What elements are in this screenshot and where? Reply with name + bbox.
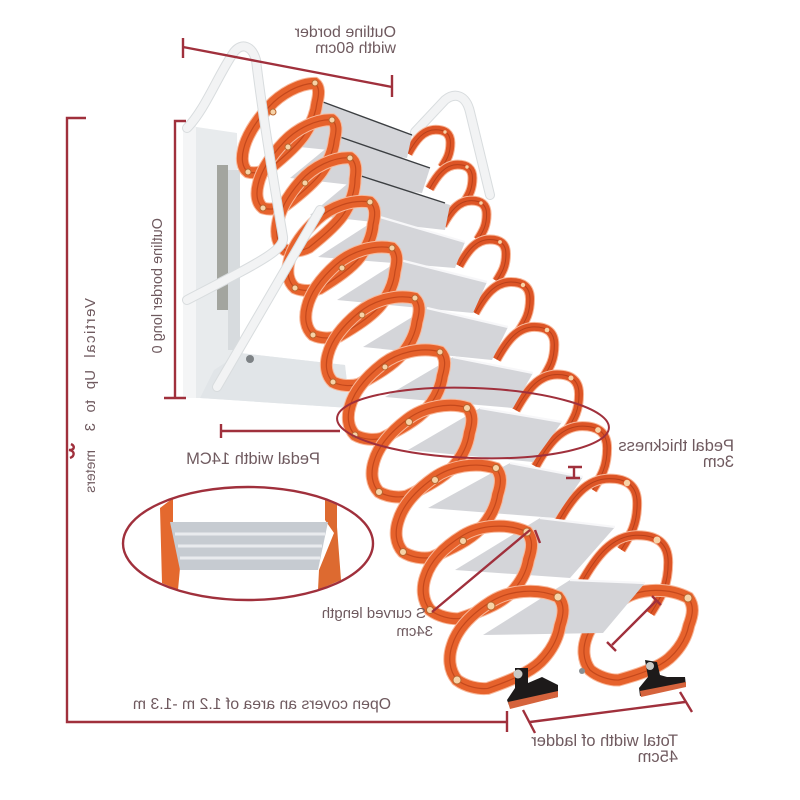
label: outline border width: Outline border (295, 24, 396, 41)
label: outline border long: Outline border long 0 (150, 218, 166, 353)
wall bracket plate (183, 125, 350, 408)
label: vertical height: 3 (82, 423, 99, 431)
label: vertical height: Up (82, 370, 99, 389)
label: vertical height: meters (82, 450, 98, 493)
label: vertical height: Vertical (82, 298, 99, 359)
label: curved length: S curved length (322, 605, 426, 622)
label: vertical height: to (82, 400, 99, 413)
ladder feet (507, 660, 686, 709)
label: pedal width: Pedal width 14CM (186, 450, 320, 468)
label: outline border width: width 60cm (315, 40, 397, 57)
dimension lines (67, 38, 692, 733)
back ring chain (408, 130, 711, 700)
front ring chain (229, 69, 583, 710)
pedal steps (280, 102, 645, 635)
label: open area: Open covers an area of 1.2 m -1.3 m (133, 696, 391, 713)
back handrail (415, 96, 490, 195)
label: curved length: 34cm (396, 623, 433, 640)
label: total ladder width: 45cm (638, 748, 678, 766)
label: pedal thickness: 3cm (703, 453, 734, 471)
label: pedal thickness: Pedal thickness (618, 437, 734, 455)
inset: pedal close-up (123, 487, 373, 600)
label: total ladder width: Total width of ladder (531, 732, 678, 750)
front handrail and struts (187, 46, 320, 387)
